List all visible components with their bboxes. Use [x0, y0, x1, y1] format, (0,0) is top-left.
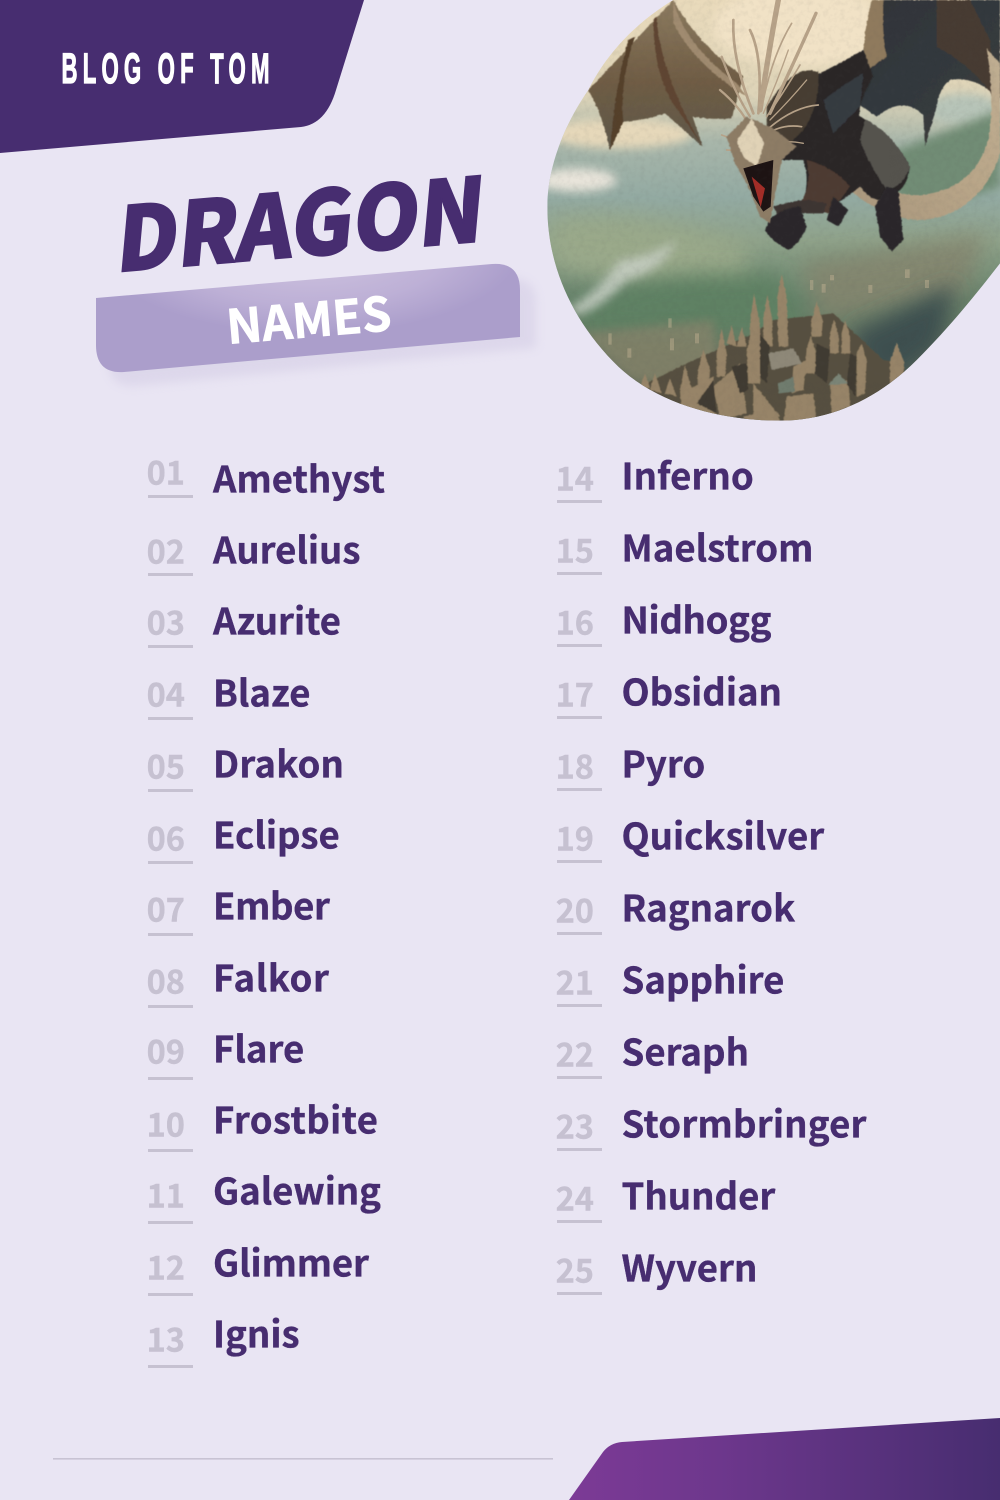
- name 08: Falkor: [213, 949, 329, 1002]
- castle: [640, 273, 907, 430]
- name 07: [147, 877, 330, 936]
- subtitle band: names: [96, 264, 536, 386]
- name 23: Stormbringer: [622, 1095, 867, 1148]
- sky and clouds: [537, 0, 1000, 400]
- name 13: [147, 1305, 300, 1368]
- right column of names: [556, 447, 867, 1295]
- name 16: [556, 591, 772, 647]
- name 03: Azurite: [212, 592, 341, 645]
- name 10: Frostbite: [213, 1091, 378, 1144]
- name 05: [147, 735, 344, 792]
- name 18: [556, 735, 705, 791]
- name 11: [147, 1162, 381, 1224]
- name 08: [147, 949, 329, 1008]
- name 19: 19: [556, 814, 594, 860]
- name 17: [556, 663, 782, 719]
- name 21: Sapphire: [622, 951, 784, 1004]
- name 22: 22: [556, 1030, 594, 1076]
- name 25: 25: [556, 1246, 594, 1292]
- name 05: Drakon: [213, 735, 344, 788]
- name 20: [556, 879, 795, 935]
- name 25: [556, 1239, 757, 1295]
- name 24: Thunder: [622, 1167, 775, 1220]
- name 02: 02: [147, 526, 185, 574]
- name 06: Eclipse: [213, 806, 340, 859]
- name 08: 08: [147, 956, 185, 1004]
- name 24: [556, 1167, 775, 1223]
- footer corner shape: [569, 1418, 1000, 1500]
- footer rule: [53, 1458, 553, 1460]
- name 11: 11: [147, 1170, 185, 1218]
- left wing: [588, 0, 747, 150]
- name 03: [147, 592, 341, 648]
- name 22: [556, 1023, 749, 1079]
- name 04: Blaze: [213, 664, 311, 717]
- name 07: 07: [147, 884, 185, 932]
- distant town: [608, 269, 929, 358]
- name 20: 20: [556, 886, 594, 932]
- name 16: Nidhogg: [622, 591, 772, 644]
- illustration: dragon over castle in blob frame: [537, 0, 1000, 430]
- body: [773, 50, 910, 220]
- name 11: Galewing: [213, 1162, 381, 1215]
- name 13: Ignis: [213, 1305, 300, 1358]
- name 10: [147, 1091, 378, 1152]
- name 13: 13: [147, 1314, 185, 1362]
- name 14: Inferno: [622, 447, 754, 500]
- name 15: 15: [556, 526, 594, 572]
- name 17: Obsidian: [622, 663, 782, 716]
- name 06: 06: [147, 814, 185, 860]
- name 05: 05: [147, 742, 185, 788]
- name 22: Seraph: [622, 1023, 749, 1076]
- blog name: BLOG OF TOM: [62, 45, 275, 93]
- name 23: 23: [556, 1102, 594, 1148]
- name 02: Aurelius: [212, 521, 360, 574]
- name 07: Ember: [213, 877, 330, 930]
- name 09: [147, 1020, 304, 1080]
- name 09: Flare: [213, 1020, 304, 1073]
- name 01: 01: [147, 448, 185, 494]
- right wing: [853, 0, 1000, 147]
- name 10: 10: [147, 1100, 185, 1146]
- name 21: [556, 951, 784, 1007]
- name 12: 12: [147, 1242, 185, 1290]
- title: dragon: DRAGON: [113, 138, 491, 298]
- name 17: 17: [556, 670, 594, 716]
- subtitle text: NAMES: [223, 275, 394, 358]
- name 20: Ragnarok: [622, 879, 795, 932]
- header banner: [0, 0, 364, 153]
- name 03: 03: [147, 598, 185, 644]
- name 02: [147, 521, 360, 576]
- name 14: 14: [556, 454, 594, 500]
- name 21: 21: [556, 958, 594, 1004]
- name 01: [147, 448, 385, 503]
- name 19: Quicksilver: [622, 807, 824, 860]
- name 04: [147, 664, 311, 720]
- name 18: Pyro: [622, 735, 705, 788]
- name 01: Amethyst: [212, 450, 385, 503]
- name 12: [147, 1234, 369, 1296]
- name 06: [147, 806, 340, 864]
- claws: [765, 187, 903, 252]
- name 15: Maelstrom: [622, 519, 813, 572]
- painterly grain: [568, 0, 976, 188]
- name 25: Wyvern: [622, 1239, 757, 1292]
- head and spikes: [720, 0, 818, 223]
- name 09: 09: [147, 1026, 185, 1074]
- name 24: 24: [556, 1174, 594, 1220]
- name 04: 04: [147, 670, 185, 716]
- name 12: Glimmer: [213, 1234, 369, 1287]
- name 18: 18: [556, 742, 594, 788]
- left column of names: [147, 448, 385, 1368]
- name 16: 16: [556, 598, 594, 644]
- tail: [850, 48, 1000, 220]
- name 14: [556, 447, 754, 503]
